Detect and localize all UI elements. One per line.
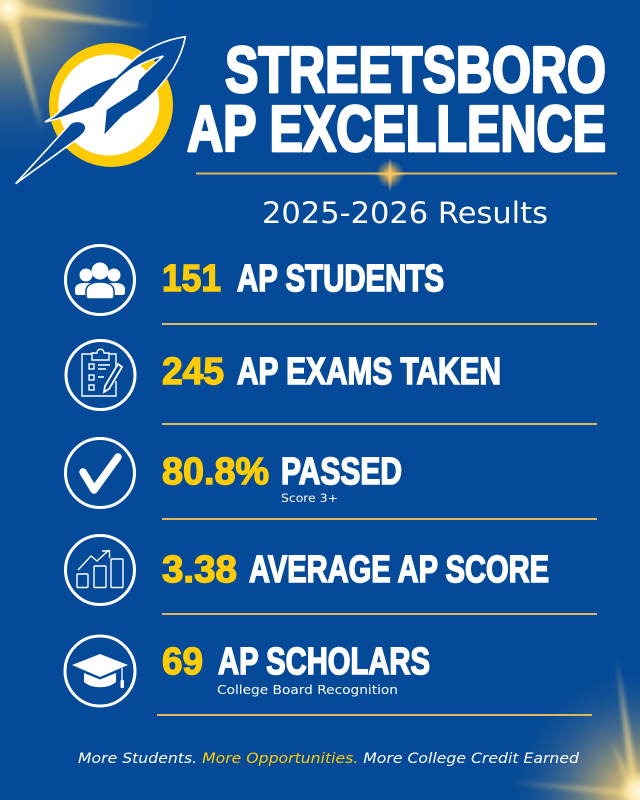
stat text: Score 3+	[281, 491, 338, 505]
rocket body	[16, 37, 185, 184]
stat text: PASSED	[281, 451, 402, 493]
icon: people	[66, 246, 134, 314]
title rule with spark	[196, 158, 617, 192]
row: AP scholars	[65, 636, 592, 716]
light flare: top left	[0, 0, 185, 185]
stat text	[162, 641, 430, 697]
stat text: 3.38	[162, 549, 237, 591]
row: AP students	[66, 246, 597, 325]
stat text: 80.8%	[162, 451, 269, 493]
stat text	[162, 258, 444, 300]
icon: graduation cap	[65, 636, 135, 706]
stat text: 151	[162, 258, 221, 300]
light flare: bottom right	[500, 660, 640, 800]
stat text: 245	[162, 351, 224, 393]
stat text	[162, 549, 549, 591]
icon: clipboard	[66, 340, 135, 410]
icon: rising bar chart	[66, 536, 134, 604]
row: AP exams	[66, 340, 597, 425]
icon: check mark	[66, 438, 134, 508]
rocket flame	[16, 121, 86, 184]
stat text	[162, 451, 402, 505]
stat text: 69	[162, 641, 203, 683]
stat text	[162, 351, 501, 393]
stat text: AP STUDENTS	[237, 258, 444, 300]
title	[187, 33, 606, 165]
subtitle: 2025-2026 Results	[262, 196, 548, 230]
logo: rocket in circle	[16, 37, 185, 184]
stat text: AVERAGE AP SCORE	[249, 549, 549, 591]
stat text: AP EXAMS TAKEN	[237, 351, 501, 393]
footer tagline: More Students. More Opportunities. More College Credit Earned	[78, 751, 580, 767]
row: average score	[66, 536, 597, 615]
stat text: College Board Recognition	[217, 682, 398, 697]
row: passed	[66, 438, 597, 520]
stat text: AP SCHOLARS	[218, 641, 430, 683]
